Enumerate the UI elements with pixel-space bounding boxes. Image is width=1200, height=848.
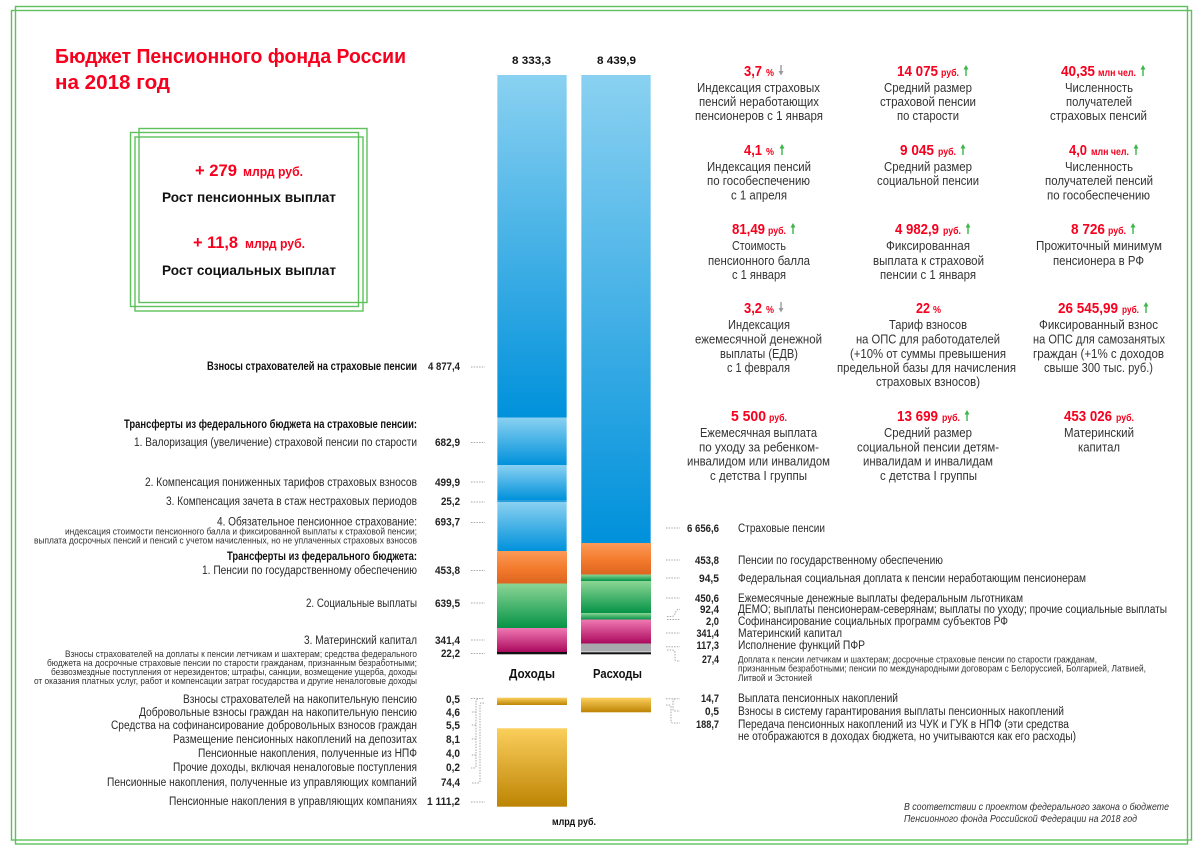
stat: self-employed contribution: Фиксированный взнос	[1039, 318, 1158, 332]
left income labels: безвозмездные поступления от нерезидентов; штрафы, санкции, возмещение ущерба, доходы	[51, 667, 417, 677]
stat: fixed payment: выплата к страховой	[873, 254, 984, 268]
stat: subsistence minimum: пенсионера в РФ	[1053, 254, 1144, 268]
stat: maternity capital: капитал	[1078, 440, 1120, 454]
stat: average social pension: 9 045	[900, 143, 934, 159]
stat: state pension recipients: Численность	[1065, 160, 1133, 174]
left connectors	[471, 367, 485, 802]
right expense labels: 14,7	[701, 693, 719, 705]
stat: disabled child care payment: 5 500	[731, 409, 766, 425]
stat: state pension recipients: млн чел.	[1091, 146, 1129, 158]
footnote: Пенсионного фонда Российской Федерации на 2018 год	[904, 813, 1137, 825]
left income labels: Пенсионные накопления, полученные из НПФ	[198, 748, 417, 760]
right expense labels: Федеральная социальная доплата к пенсии неработающим пенсионерам	[738, 573, 1086, 585]
stat: average social pension: Средний размер	[884, 160, 972, 174]
left income labels: 3. Материнский капитал	[304, 635, 417, 647]
right expense labels: 117,3	[696, 640, 719, 652]
stat: average social pension: руб.	[938, 146, 956, 158]
arrow: up	[1134, 144, 1138, 155]
bar chart: income column	[497, 75, 567, 654]
stat: state pension indexation: %	[766, 146, 775, 158]
stat: disabled child care payment: руб.	[769, 412, 787, 424]
stat: average old-age pension	[880, 64, 976, 123]
right expense labels: Страховые пенсии	[738, 523, 825, 535]
stat: insurance pension recipients	[1050, 64, 1147, 123]
right expense labels: Выплата пенсионных накоплений	[738, 693, 898, 705]
left income labels: от оказания платных услуг, работ и компенсации затрат государства и другие неналоговые доходы	[34, 676, 417, 686]
left income labels: 4 877,4	[428, 361, 461, 373]
stat: disabled children social pension: руб.	[942, 412, 960, 424]
stat: employer contribution rate: на ОПС для работодателей	[856, 332, 1000, 346]
left income labels: 2. Социальные выплаты	[306, 598, 417, 610]
unit label: млрд руб.	[552, 816, 596, 828]
stat: disabled child care payment: инвалидом или инвалидом	[687, 454, 830, 468]
stat: insurance pension indexation: 3,7	[744, 64, 762, 80]
stat: insurance pension recipients: Численность	[1065, 81, 1133, 95]
stat: insurance pension indexation: пенсионеров с 1 января	[695, 109, 823, 123]
pension payments growth: + 279	[195, 161, 237, 180]
left income labels: 0,5	[446, 694, 460, 706]
right expense labels: 6 656,6	[687, 523, 719, 535]
left income labels: 0,2	[446, 762, 460, 774]
social payments growth: + 11,8	[193, 233, 238, 252]
stat: maternity capital: руб.	[1116, 412, 1134, 424]
stat: fixed payment	[873, 222, 984, 282]
right expense labels: Доплата к пенсии летчикам и шахтерам; досрочные страховые пенсии по старости гражданам,	[738, 654, 1097, 664]
stat: maternity capital: Материнский	[1064, 426, 1134, 440]
left income labels: индексация стоимости пенсионного балла и фиксированной выплаты к страховой пенсии;	[65, 526, 417, 536]
right expense labels: 188,7	[696, 719, 719, 731]
bar: savings income, small	[497, 698, 567, 705]
title: на 2018 год	[55, 72, 170, 94]
right expense labels: Ежемесячные денежные выплаты федеральным льготникам	[738, 593, 1023, 605]
stat: state pension recipients: получателей пенсий	[1045, 174, 1153, 188]
stat: employer contribution rate: 22	[916, 301, 930, 317]
stat: monthly payment indexation: 3,2	[744, 301, 762, 317]
left income labels: выплата досрочных пенсий и пенсий с учетом начисленных, но не уплаченных страховых взносов	[34, 536, 417, 546]
right expense labels	[687, 523, 1167, 743]
stat: subsistence minimum: Прожиточный минимум	[1036, 239, 1162, 253]
right expense labels: 27,4	[702, 654, 720, 666]
stat: disabled child care payment: с детства I группы	[710, 469, 807, 483]
right expense labels: Передача пенсионных накоплений из ЧУК и ГУК в НПФ (эти средства	[738, 719, 1070, 731]
stat: monthly payment indexation: ежемесячной денежной	[695, 332, 822, 346]
right expense labels: Взносы в систему гарантирования выплаты пенсионных накоплений	[738, 706, 1064, 718]
stat: insurance pension indexation	[695, 64, 823, 123]
right expense labels: Материнский капитал	[738, 628, 842, 640]
left income labels: 25,2	[441, 496, 460, 508]
left income labels: 1. Пенсии по государственному обеспечению	[202, 565, 417, 577]
arrow: up	[1130, 223, 1136, 234]
stat: state pension indexation: с 1 апреля	[731, 188, 787, 202]
stat: subsistence minimum: руб.	[1108, 225, 1126, 237]
stat: average old-age pension: Средний размер	[884, 81, 972, 95]
right connectors	[666, 528, 680, 723]
chart total: expenses: 8 439,9	[597, 55, 636, 67]
stat: disabled children social pension: инвалидам и инвалидам	[863, 454, 993, 468]
stat: state pension recipients: 4,0	[1069, 143, 1087, 159]
pension payments growth	[162, 161, 336, 205]
stat: self-employed contribution: руб.	[1122, 304, 1139, 316]
left income labels: 639,5	[435, 598, 460, 610]
stat: state pension indexation: Индексация пенсий	[707, 160, 811, 174]
left income labels: 22,2	[441, 648, 460, 660]
stat: average social pension: социальной пенсии	[877, 174, 979, 188]
stat: disabled children social pension: социальной пенсии детям-	[857, 440, 999, 454]
stat: self-employed contribution	[1033, 301, 1166, 375]
arrow: down	[778, 65, 784, 76]
left income labels: Пенсионные накопления в управляющих компаниях	[169, 796, 417, 808]
left income labels: Трансферты из федерального бюджета на страховые пенсии:	[124, 419, 417, 431]
stat: maternity capital: 453 026	[1064, 409, 1112, 425]
stat: employer contribution rate: Тариф взносов	[889, 318, 967, 332]
arrow: down	[778, 302, 784, 312]
stat: employer contribution rate	[837, 301, 1016, 389]
stat: disabled children social pension	[857, 409, 999, 483]
stat: insurance pension recipients: млн чел.	[1098, 67, 1136, 79]
stat: disabled child care payment	[687, 409, 830, 483]
arrow: up	[960, 144, 966, 155]
stat: monthly payment indexation: Индексация	[728, 318, 790, 332]
stat: average old-age pension: страховой пенсии	[880, 95, 976, 109]
left income labels: 3. Компенсация зачета в стаж нестраховых периодов	[166, 496, 417, 508]
left income labels: 453,8	[435, 565, 460, 577]
stat: disabled children social pension: с детства I группы	[880, 469, 977, 483]
left income labels: Взносы страхователей на страховые пенсии	[207, 361, 417, 373]
stat: self-employed contribution: свыше 300 тыс. руб.)	[1044, 361, 1153, 375]
stat: insurance pension indexation: %	[766, 67, 775, 79]
left income labels: 1. Валоризация (увеличение) страховой пенсии по старости	[134, 437, 417, 449]
left income labels: Взносы страхователей на накопительную пенсию	[183, 694, 417, 706]
stat: disabled children social pension: Средний размер	[884, 426, 972, 440]
left income labels: 693,7	[435, 516, 460, 528]
stat: pension point value: с 1 января	[732, 268, 786, 282]
left income labels: 8,1	[446, 734, 460, 746]
right expense labels: 94,5	[699, 573, 719, 585]
stat: fixed payment: руб.	[943, 225, 961, 237]
stat: maternity capital	[1064, 409, 1134, 454]
left income labels: Прочие доходы, включая неналоговые поступления	[173, 762, 417, 774]
footnote: В соответствии с проектом федерального закона о бюджете	[904, 801, 1169, 813]
chart total: income: 8 333,3	[512, 55, 551, 67]
right expense labels: Исполнение функций ПФР	[738, 640, 865, 652]
left income labels: Трансферты из федерального бюджета:	[227, 551, 417, 563]
right expense labels: 450,6	[695, 593, 719, 605]
stat: state pension indexation	[707, 143, 811, 202]
left income labels: 4. Обязательное пенсионное страхование:	[217, 516, 417, 528]
stat: state pension indexation: 4,1	[744, 143, 762, 159]
arrow: up	[790, 223, 796, 234]
stat: average social pension	[877, 143, 979, 188]
right expense labels: 2,0	[706, 616, 719, 628]
left income labels: 341,4	[435, 635, 461, 647]
left income labels: 2. Компенсация пониженных тарифов страховых взносов	[145, 477, 417, 489]
stat: insurance pension indexation: пенсий неработающих	[699, 95, 820, 109]
bar: savings income, large	[497, 728, 567, 807]
stat: pension point value: пенсионного балла	[708, 254, 810, 268]
title	[55, 46, 406, 94]
left income labels: 4,0	[446, 748, 460, 760]
social payments growth	[162, 233, 336, 278]
left income labels: Пенсионные накопления, полученные из управляющих компаний	[107, 777, 417, 789]
stat: state pension recipients: по гособеспечению	[1047, 188, 1150, 202]
arrow: up	[966, 223, 970, 234]
right expense labels: признанным безработными; пенсии по международными договорам с Белоруссией, Болгарией, Латвией,	[738, 664, 1146, 674]
stat: employer contribution rate: страховых взносов)	[876, 375, 980, 389]
left income labels: бюджета на досрочные страховые пенсии по старости гражданам, признанным безработными;	[47, 658, 417, 668]
stat: employer contribution rate: (+10% от суммы превышения	[850, 347, 1006, 361]
arrow: up	[1144, 302, 1148, 313]
stat: self-employed contribution: 26 545,99	[1058, 301, 1118, 317]
stat: subsistence minimum	[1036, 222, 1162, 268]
right expense labels: 341,4	[696, 628, 720, 640]
stat: state pension indexation: по гособеспечению	[707, 174, 810, 188]
left income labels: Добровольные взносы граждан на накопительную пенсию	[139, 707, 417, 719]
left income labels: 4,6	[446, 707, 460, 719]
stat: average old-age pension: по старости	[897, 109, 959, 123]
title: Бюджет Пенсионного фонда России	[55, 46, 406, 68]
stat: insurance pension indexation: Индексация страховых	[697, 81, 821, 95]
stat: insurance pension recipients: получателей	[1066, 95, 1132, 109]
right expense labels: не отображаются в доходах бюджета, но учитываются как его расходы)	[738, 731, 1076, 743]
right expense labels: Софинансирование социальных программ субъектов РФ	[738, 616, 1008, 628]
stat: subsistence minimum: 8 726	[1071, 222, 1105, 238]
stat: fixed payment: 4 982,9	[895, 222, 939, 238]
left income labels: 74,4	[441, 777, 461, 789]
stat: monthly payment indexation: %	[766, 304, 775, 316]
stat: average old-age pension: 14 075	[897, 64, 938, 80]
stat: disabled child care payment: по уходу за ребенком-	[699, 440, 819, 454]
pension payments growth: Рост пенсионных выплат	[162, 189, 336, 205]
stat: employer contribution rate: %	[933, 304, 942, 316]
left income labels: Размещение пенсионных накоплений на депозитах	[173, 734, 417, 746]
arrow: up	[964, 65, 968, 76]
stat: state pension recipients	[1045, 143, 1153, 202]
stat: self-employed contribution: на ОПС для самозанятых	[1033, 332, 1166, 346]
stat: pension point value: 81,49	[732, 222, 765, 238]
left income labels: Взносы страхователей на доплаты к пенсии летчикам и шахтерам; средства федерального	[65, 649, 417, 659]
pension payments growth: млрд руб.	[243, 164, 303, 179]
right expense labels: 453,8	[695, 555, 719, 567]
stat: insurance pension recipients: 40,35	[1061, 64, 1095, 80]
stat: fixed payment: пенсии с 1 января	[880, 268, 976, 282]
footnote	[904, 801, 1169, 825]
social payments growth: млрд руб.	[245, 236, 305, 251]
column label: expenses: Расходы	[593, 666, 642, 681]
right expense labels: 92,4	[700, 604, 720, 616]
left income labels	[34, 361, 461, 808]
stat: disabled child care payment: Ежемесячная выплата	[700, 426, 817, 440]
left income labels: Средства на софинансирование добровольных взносов граждан	[111, 720, 417, 732]
bar chart: expenses column	[581, 75, 651, 654]
social payments growth: Рост социальных выплат	[162, 262, 336, 278]
arrow: up	[964, 410, 970, 421]
stat: insurance pension recipients: страховых пенсий	[1050, 109, 1147, 123]
stat: disabled children social pension: 13 699	[897, 409, 938, 425]
stat: employer contribution rate: предельной базы для начисления	[837, 361, 1016, 375]
stat: pension point value: Стоимость	[732, 239, 786, 253]
left income labels: 499,9	[435, 477, 460, 489]
left income labels: 682,9	[435, 437, 460, 449]
panel: growth summary	[130, 128, 367, 311]
right expense labels: Пенсии по государственному обеспечению	[738, 555, 943, 567]
right expense labels: Литвой и Эстонией	[738, 673, 812, 683]
stat: monthly payment indexation	[695, 301, 822, 375]
stat: pension point value	[708, 222, 810, 282]
stat: monthly payment indexation: выплаты (ЕДВ)	[720, 347, 798, 361]
left income labels: 5,5	[446, 720, 460, 732]
left income labels: 1 111,2	[427, 796, 460, 808]
stat: fixed payment: Фиксированная	[886, 239, 970, 253]
column label: income: Доходы	[509, 666, 555, 681]
arrow: up	[1140, 65, 1146, 76]
bar: savings expenses	[581, 698, 651, 712]
stat: average old-age pension: руб.	[941, 67, 959, 79]
stat: self-employed contribution: граждан (+1% с доходов	[1033, 347, 1164, 361]
arrow: up	[780, 144, 784, 155]
stat: monthly payment indexation: с 1 февраля	[727, 361, 790, 375]
right expense labels: 0,5	[705, 706, 719, 718]
stat: pension point value: руб.	[768, 225, 786, 237]
